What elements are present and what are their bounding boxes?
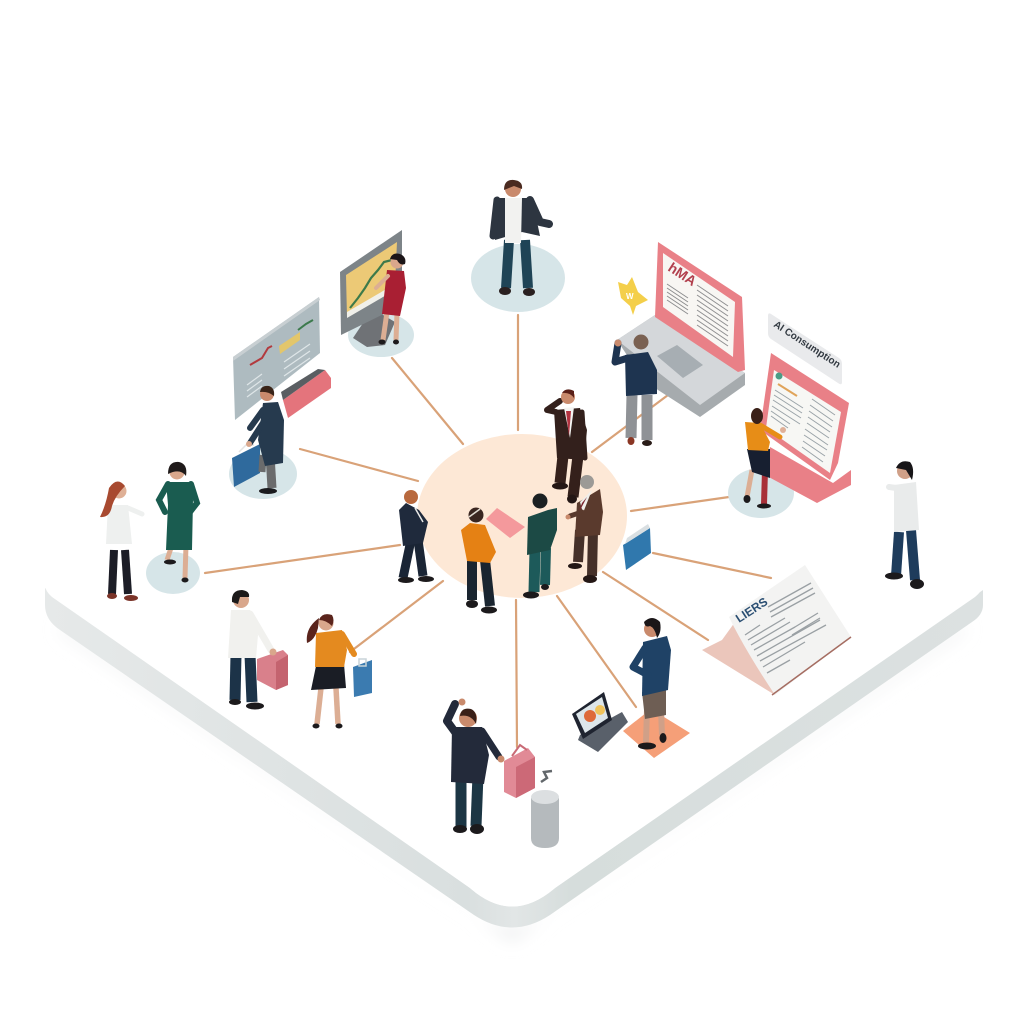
base discs: [146, 244, 794, 594]
platform: [45, 130, 983, 942]
person: top standing man: [493, 180, 549, 296]
sign label: [768, 313, 842, 384]
cylinder bin: [531, 771, 559, 848]
connector lines: [205, 315, 771, 747]
person: woman in orange top: [307, 614, 354, 728]
sign label: AI Consumption: [771, 319, 842, 371]
icon: yellow star badge: [618, 277, 648, 315]
document: large curled paper: [702, 565, 851, 695]
icon: yellow star badge: W: [626, 292, 634, 301]
person: hub woman in orange: [461, 508, 497, 614]
suitcase: pink bottom: [504, 745, 535, 798]
person: man at far right: [885, 461, 924, 589]
pink document board: [760, 353, 851, 503]
hub circle: [417, 434, 627, 598]
briefcase: left blue: [232, 444, 260, 487]
person: man in long navy coat: [246, 386, 284, 494]
person: man at bottom with raised hand: [447, 698, 504, 834]
person: woman in orange at board: [744, 408, 786, 508]
pink paper on hub: [486, 508, 525, 538]
person: man with navy jacket and shorts: [633, 618, 671, 750]
orange floor mat: [623, 709, 690, 758]
blue folder: [623, 524, 651, 570]
suitcase: small blue: [353, 659, 372, 697]
person: man in white shirt: [228, 590, 276, 710]
screen heading: hMA: [665, 259, 700, 289]
person: man at laptop, grey trousers: [614, 334, 657, 446]
big laptop with document: [617, 242, 745, 417]
person: hub man at left: [398, 490, 434, 583]
person: woman with red hair: [100, 481, 142, 601]
suitcase: pink by man in white: [257, 650, 288, 690]
monitor: upper chart screen: [340, 230, 402, 347]
monitor: left chart screen: [233, 297, 331, 420]
person: woman in red dress: [376, 254, 406, 344]
person: hub grey-haired man: [566, 475, 603, 583]
laptop: small: [572, 692, 628, 752]
paper heading: LIERS: [733, 595, 770, 626]
person: hub man in green jacket: [523, 494, 557, 598]
person: woman in green dress: [159, 462, 197, 582]
person: hub man in brown suit with red tie: [547, 389, 587, 504]
